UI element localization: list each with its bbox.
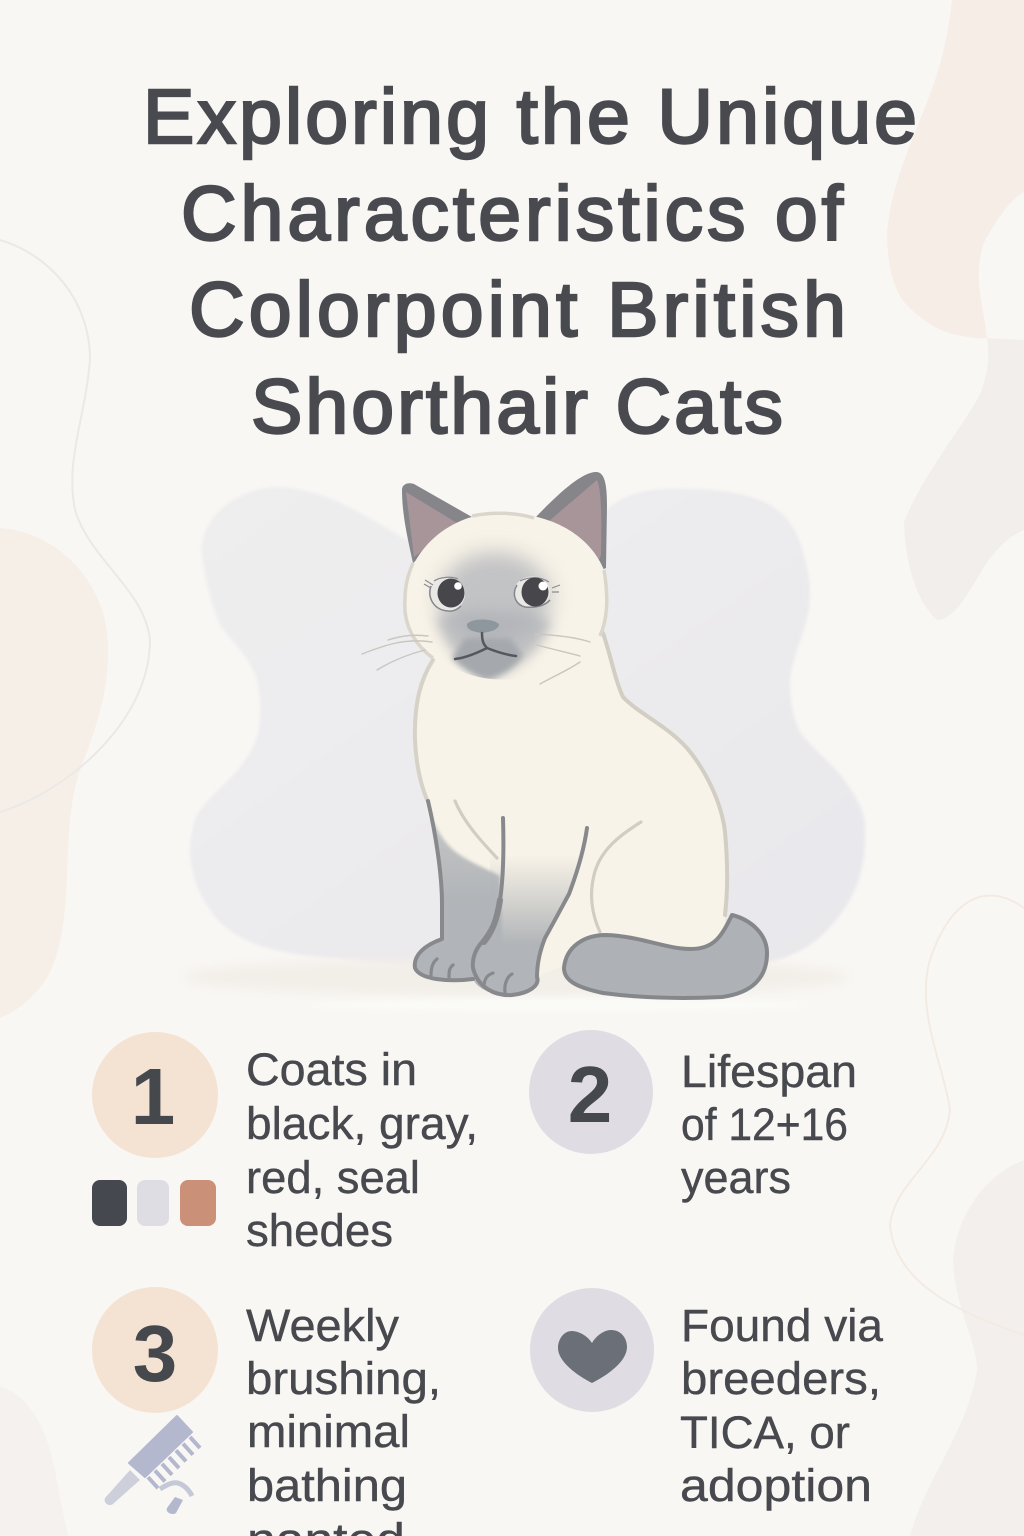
badge 2 <box>529 1030 653 1154</box>
coat colors text: red, seal <box>246 1152 420 1203</box>
icon: heart <box>558 1330 627 1383</box>
badge 1 <box>92 1032 218 1158</box>
right ear <box>534 472 607 570</box>
panel: grooming: 3 <box>133 1309 177 1398</box>
where to find text: TICA, or <box>680 1407 850 1458</box>
panel: lifespan: 2 <box>568 1050 612 1139</box>
panel: grooming <box>92 1287 441 1536</box>
title: Exploring the Unique <box>143 74 917 160</box>
head <box>405 513 607 680</box>
lifespan text: Lifespan <box>681 1046 857 1097</box>
grooming text: Weekly <box>246 1300 400 1351</box>
color swatches <box>92 1180 216 1226</box>
leg shading <box>416 821 576 994</box>
lifespan text <box>681 1046 857 1203</box>
lifespan text: of 12+16 <box>681 1099 848 1150</box>
panel: coat colors: 1 <box>131 1052 175 1141</box>
coat colors text: shedes <box>246 1205 393 1256</box>
nose and mouth <box>455 620 516 659</box>
backdrop blob behind cat <box>182 487 865 1012</box>
title: Shorthair Cats <box>251 364 783 450</box>
ground shadow <box>182 958 850 996</box>
cat body <box>415 633 727 995</box>
chest and haunch lines <box>455 801 641 932</box>
left ear <box>402 483 472 563</box>
grooming text <box>246 1300 441 1536</box>
cat illustration <box>362 472 767 1000</box>
right eye <box>514 576 560 608</box>
grooming text: minimal <box>247 1406 410 1457</box>
face mask <box>436 552 552 680</box>
coat colors text: Coats in <box>246 1044 417 1095</box>
badge heart <box>530 1288 654 1412</box>
body outline <box>415 660 433 800</box>
front legs and paws <box>415 801 587 995</box>
whiskers <box>362 634 590 684</box>
coat colors text: black, gray, <box>246 1098 478 1149</box>
where to find text: Found via <box>681 1300 884 1351</box>
title: Colorpoint British <box>189 267 846 353</box>
left eye <box>424 577 465 611</box>
grooming text: brushing, <box>246 1353 441 1404</box>
badge 3 <box>92 1287 218 1413</box>
panel: coat colors <box>92 1032 478 1256</box>
where to find text <box>680 1300 884 1511</box>
coat colors text <box>246 1044 478 1256</box>
panel: where to find <box>530 1288 884 1511</box>
lifespan text: years <box>681 1152 791 1203</box>
grooming text: bathing <box>247 1460 407 1511</box>
panel: lifespan <box>529 1030 857 1203</box>
tail <box>564 915 767 998</box>
title <box>143 74 917 450</box>
where to find text: breeders, <box>681 1353 881 1404</box>
head outline <box>405 513 607 658</box>
title: Characteristics of <box>181 171 844 257</box>
icon: comb <box>105 1416 200 1514</box>
where to find text: adoption <box>680 1460 872 1511</box>
